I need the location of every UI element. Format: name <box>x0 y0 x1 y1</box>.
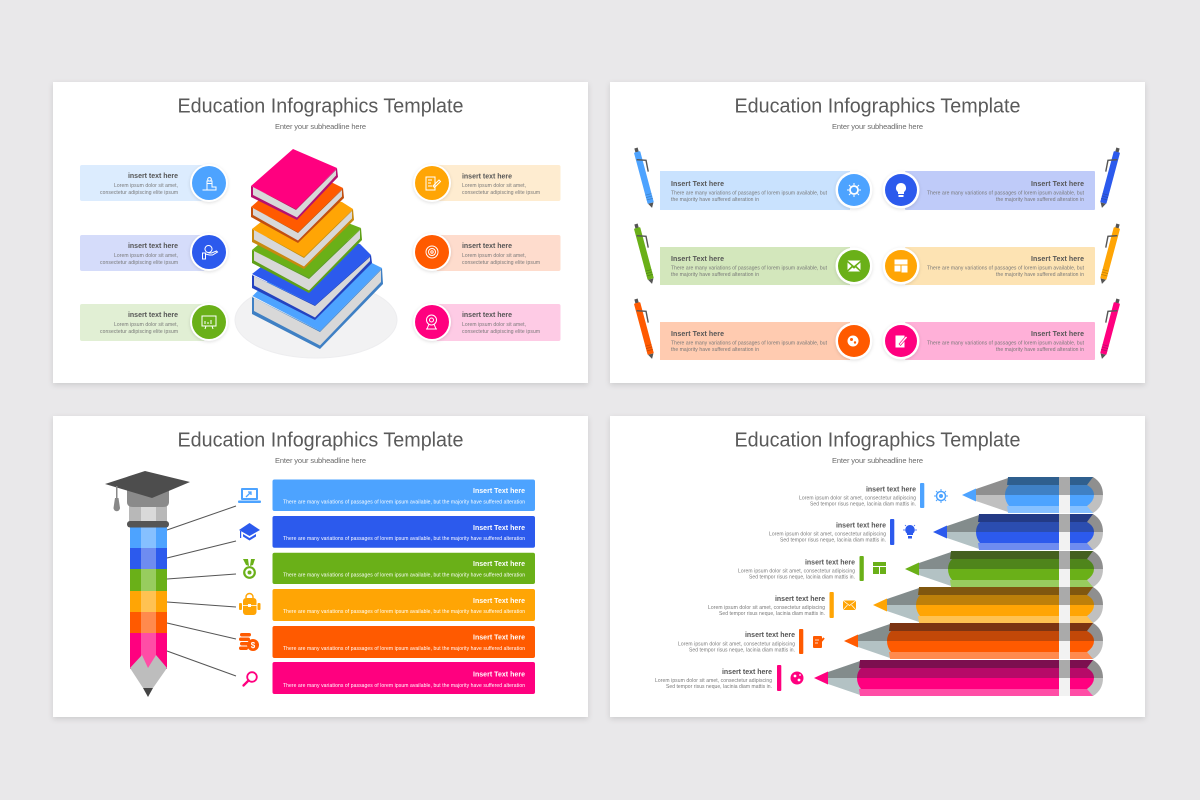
item: pink: Lorem ipsum dolor sit amet, <box>462 322 526 328</box>
row: yellow <box>882 247 1095 285</box>
item: yellow <box>413 164 560 202</box>
icon: coins: $ <box>251 641 256 650</box>
pencil: green <box>905 551 1103 587</box>
item: yellow: Lorem ipsum dolor sit amet, <box>462 183 526 189</box>
icon: notepad <box>813 636 824 648</box>
label: pink: Lorem ipsum dolor sit amet, consectetur adipiscing <box>655 678 772 684</box>
book: green <box>252 210 362 293</box>
subtitle: Enter your subheadline here <box>832 456 923 465</box>
panel: stacked books slide <box>53 82 588 383</box>
item: yellow: consectetur adipiscing elite ipsum <box>462 190 540 196</box>
label: pink <box>655 665 781 691</box>
pen: pink <box>1096 297 1121 360</box>
row: pink: Insert Text here <box>1031 331 1084 338</box>
bar: pink: There are many variations of passages of lorem ipsum available, but the majority have suffered alteration <box>283 683 525 689</box>
pencil: orange <box>873 587 1103 623</box>
book: red orange <box>251 170 344 243</box>
icon: chart disc <box>790 672 804 684</box>
label: orange: Sed tempor risus neque, lacinia diam mattis in. <box>719 611 825 617</box>
item: blue: Lorem ipsum dolor sit amet, <box>114 183 178 189</box>
item: orange: consectetur adipiscing elite ipsum <box>462 260 540 266</box>
label: blue <box>799 483 924 508</box>
platform ellipse <box>235 282 397 358</box>
row: orange: Insert Text here <box>671 331 724 338</box>
item: dark blue: insert text here <box>128 243 178 250</box>
graduation cap <box>105 471 190 511</box>
item: dark blue <box>80 233 228 271</box>
icon: envelope <box>843 600 856 610</box>
icon: backpack <box>239 594 260 615</box>
row: orange: There are many variations of passages of lorem ipsum available, but <box>671 340 828 346</box>
row: green: There are many variations of passages of lorem ipsum available, but <box>671 266 828 272</box>
label: red orange: Lorem ipsum dolor sit amet, consectetur adipiscing <box>678 642 795 648</box>
label: red orange <box>678 629 803 654</box>
bar: blue <box>272 480 535 511</box>
bar: blue: There are many variations of passages of lorem ipsum available, but the majority have suffered alteration <box>283 500 525 506</box>
item: yellow: insert text here <box>462 174 512 180</box>
item: green: consectetur adipiscing elite ipsum <box>100 329 178 335</box>
panel: graduation pencil slide <box>53 416 588 717</box>
row: dark blue: the majority have suffered alteration in <box>996 197 1084 203</box>
panel: pens slide <box>610 82 1145 383</box>
item: pink <box>413 303 560 341</box>
label: red orange: Sed tempor risus neque, lacinia diam mattis in. <box>689 648 795 654</box>
bar: pink <box>272 662 535 694</box>
label: green: insert text here <box>805 560 855 566</box>
label: green: Sed tempor risus neque, lacinia diam mattis in. <box>749 575 855 581</box>
bar: green: Insert Text here <box>473 561 525 568</box>
label: dark blue: Lorem ipsum dolor sit amet, consectetur adipiscing <box>769 532 886 538</box>
item: green: Lorem ipsum dolor sit amet, <box>114 322 178 328</box>
row: orange: the majority have suffered alteration in <box>671 347 759 353</box>
label: green <box>738 556 864 581</box>
label: dark blue: insert text here <box>836 522 886 530</box>
bar: dark blue <box>272 516 535 548</box>
label: orange <box>708 592 834 618</box>
item: blue: insert text here <box>128 173 178 180</box>
title: Education Infographics Template <box>734 430 1020 452</box>
icon: light bulb <box>903 525 917 538</box>
label: blue: insert text here <box>866 486 916 494</box>
row: yellow: Insert Text here <box>1031 256 1084 263</box>
bar: blue: Insert Text here <box>473 488 525 495</box>
item: green: insert text here <box>128 312 178 319</box>
bar: pink: Insert Text here <box>473 672 525 678</box>
row: blue <box>660 171 872 210</box>
row: yellow: the majority have suffered alteration in <box>996 272 1084 278</box>
icon: laptop <box>238 488 261 503</box>
icon: magnifier <box>244 672 257 686</box>
item: dark blue: Lorem ipsum dolor sit amet, <box>114 253 178 259</box>
bar: green: There are many variations of passages of lorem ipsum available, but the majority have suffered alteration <box>283 573 525 579</box>
title: Education Infographics Template <box>178 96 464 118</box>
row: pink <box>882 322 1095 360</box>
item: green <box>80 303 228 341</box>
title: Education Infographics Template <box>734 96 1020 118</box>
label: blue: Lorem ipsum dolor sit amet, consectetur adipiscing <box>799 496 916 502</box>
bar: dark blue: Insert Text here <box>473 525 525 532</box>
pen: dark blue <box>1096 146 1121 209</box>
item: orange: insert text here <box>462 243 512 250</box>
item: pink: insert text here <box>462 312 512 319</box>
item: orange: Lorem ipsum dolor sit amet, <box>462 253 526 259</box>
row: blue: the majority have suffered alteration in <box>671 197 759 203</box>
pen: orange <box>633 297 658 360</box>
pencil: dark blue <box>933 514 1103 550</box>
icon: gear <box>934 489 948 503</box>
row: blue: There are many variations of passages of lorem ipsum available, but <box>671 190 828 196</box>
label: orange: Lorem ipsum dolor sit amet, consectetur adipiscing <box>708 605 825 611</box>
item: blue: consectetur adipiscing elite ipsum <box>100 190 178 196</box>
label: dark blue: Sed tempor risus neque, lacinia diam mattis in. <box>780 538 886 544</box>
label: green: Lorem ipsum dolor sit amet, consectetur adipiscing <box>738 568 855 574</box>
row: dark blue: There are many variations of passages of lorem ipsum available, but <box>927 190 1085 196</box>
panel: pencils slide <box>610 416 1145 717</box>
pen: blue <box>633 146 658 209</box>
bar: orange: Insert Text here <box>473 598 525 605</box>
item: orange <box>413 233 560 271</box>
row: dark blue <box>882 171 1095 210</box>
row: pink: There are many variations of passages of lorem ipsum available, but <box>927 340 1085 346</box>
label: pink: Sed tempor risus neque, lacinia diam mattis in. <box>666 684 772 690</box>
bar: orange <box>272 589 535 621</box>
title: Education Infographics Template <box>178 430 464 452</box>
row: blue: Insert Text here <box>671 181 724 188</box>
row: green: Insert Text here <box>671 256 724 263</box>
book: light blue <box>252 235 383 349</box>
label: dark blue <box>769 519 894 545</box>
bar: dark blue: There are many variations of passages of lorem ipsum available, but the majority have suffered alteration <box>283 536 525 542</box>
row: yellow: There are many variations of passages of lorem ipsum available, but <box>927 266 1085 272</box>
pen: green <box>633 222 658 285</box>
graduation pencil <box>105 471 190 697</box>
label: blue: Sed tempor risus neque, lacinia diam mattis in. <box>810 502 916 508</box>
pencil: blue <box>962 477 1103 513</box>
label: red orange: insert text here <box>745 632 795 639</box>
row: dark blue: Insert Text here <box>1031 181 1084 188</box>
book: orange <box>252 195 354 269</box>
item: dark blue: consectetur adipiscing elite ipsum <box>100 260 178 266</box>
icon: coins <box>239 633 259 651</box>
bar: orange: There are many variations of passages of lorem ipsum available, but the majority have suffered alteration <box>283 609 525 615</box>
row: pink: the majority have suffered alteration in <box>996 347 1084 353</box>
bar: green <box>272 553 535 584</box>
icon: graduation cap <box>239 523 260 540</box>
connector lines <box>167 506 236 676</box>
row: green: the majority have suffered alteration in <box>671 272 759 278</box>
icon: medal <box>243 559 255 578</box>
pen: yellow <box>1096 222 1121 285</box>
bar: red orange: There are many variations of passages of lorem ipsum available, but the majority have suffered alteration <box>283 646 525 652</box>
pencil: red orange <box>844 623 1103 659</box>
item: blue <box>80 164 228 202</box>
book: pink <box>251 149 338 220</box>
row: green <box>660 247 872 285</box>
label: orange: insert text here <box>775 596 825 603</box>
book: dark blue <box>252 232 372 320</box>
bar: red orange <box>272 626 535 658</box>
subtitle: Enter your subheadline here <box>275 122 366 131</box>
pencil: pink <box>814 660 1103 696</box>
book stack <box>251 149 383 349</box>
row: orange <box>660 322 872 360</box>
label: pink: insert text here <box>722 669 772 676</box>
icon: browser window <box>873 562 886 574</box>
item: pink: consectetur adipiscing elite ipsum <box>462 329 540 335</box>
subtitle: Enter your subheadline here <box>275 456 366 465</box>
bar: red orange: Insert Text here <box>473 634 525 642</box>
subtitle: Enter your subheadline here <box>832 122 923 131</box>
